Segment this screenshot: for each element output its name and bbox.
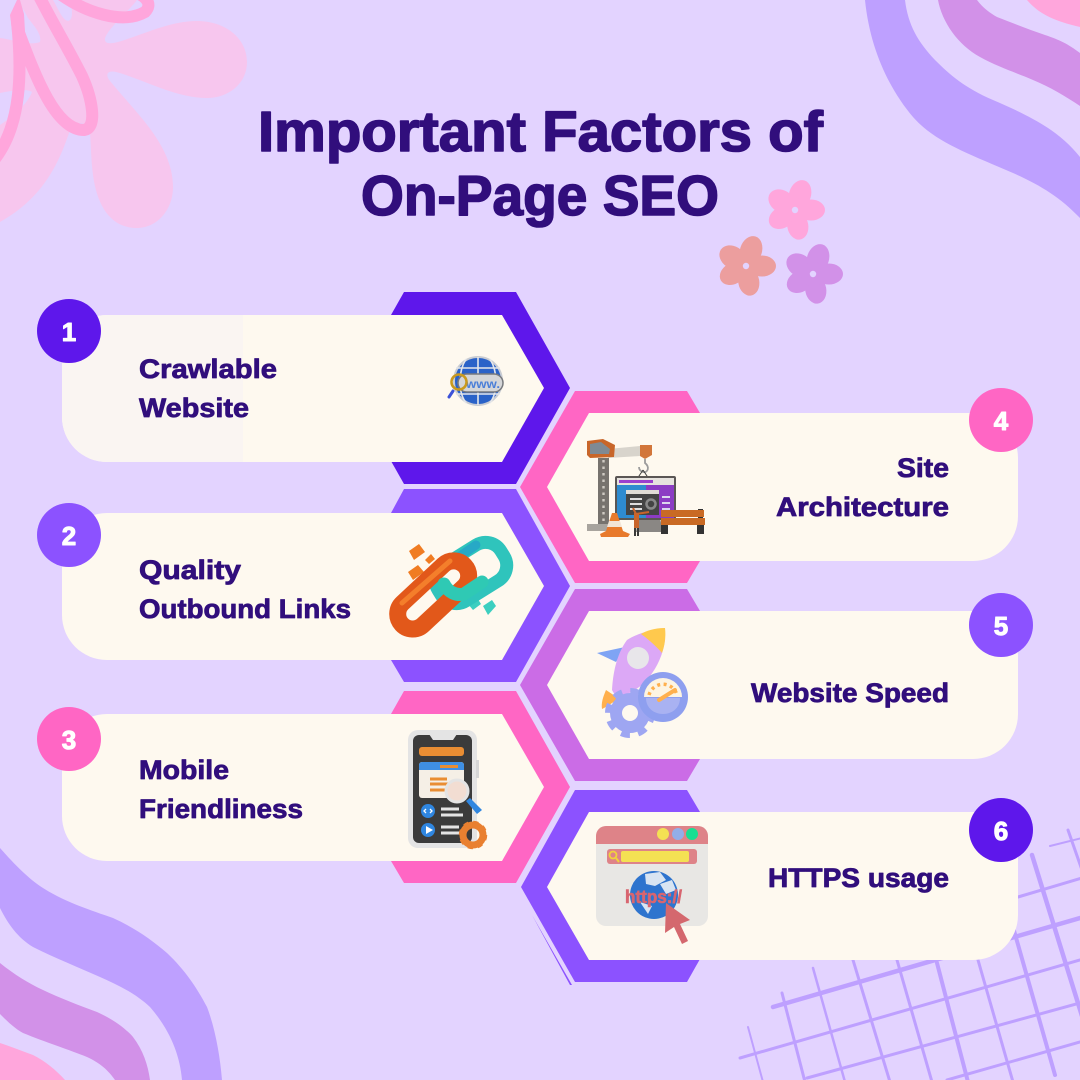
badge 5: 5: [994, 611, 1008, 641]
sliver accent: [532, 915, 572, 985]
decoration: bottom-left ribbons: [0, 848, 222, 1080]
card 1: [62, 315, 544, 462]
label 3: Friendliness: [139, 794, 303, 824]
badge 5: [969, 593, 1033, 657]
badge 3: 3: [62, 725, 76, 755]
title: Important Factors of: [258, 100, 824, 164]
icon: browser window with https globe: [596, 826, 708, 944]
hexagon frame 6: [521, 790, 700, 982]
title: [258, 100, 824, 228]
decoration: bottom-right grid: [740, 830, 1080, 1080]
decoration: top-right ribbons: [865, 0, 1080, 218]
icon: rocket, gear and speedometer: [597, 628, 688, 735]
icon: smartphone with gear: [408, 730, 486, 848]
label 2: [139, 555, 351, 624]
panel 2: Quality Outbound Links: [37, 489, 570, 682]
badge 4: [969, 388, 1033, 452]
card 3: [62, 714, 544, 861]
panel 3: Mobile Friendliness: [37, 691, 570, 883]
label 4: [776, 453, 949, 522]
label 5: Website Speed: [751, 678, 949, 708]
title: On-Page SEO: [361, 164, 719, 228]
label 1: Website: [139, 393, 249, 423]
label 2: Outbound Links: [139, 594, 351, 624]
label 6: HTTPS usage: [768, 863, 949, 893]
label 3: Mobile: [139, 755, 229, 785]
label 4: Site: [897, 453, 949, 483]
badge 2: [37, 503, 101, 567]
card 4: [547, 413, 1018, 561]
icon: www globe with magnifier: www.: [465, 377, 500, 391]
label 1: Crawlable: [139, 354, 277, 384]
panel 4: Site Architecture: [520, 388, 1033, 583]
icon: chain links: [392, 536, 514, 635]
label 3: [139, 755, 303, 824]
card 2: [62, 513, 544, 660]
icon: crane and monitor under construction: [587, 439, 705, 537]
icon: www globe with magnifier: [449, 357, 503, 405]
hexagon frame 5: [520, 589, 700, 781]
hexagon frame 3: [391, 691, 570, 883]
hexagon frame 4: [520, 391, 700, 583]
badge 1: [37, 299, 101, 363]
hexagon frame 2: [391, 489, 570, 682]
panel 1: Crawlable Website: [37, 292, 570, 484]
icon: browser window with https globe: https://: [625, 887, 682, 907]
hexagon frame 1: [391, 292, 570, 484]
decoration: top-left flower: [0, 0, 247, 228]
badge 4: 4: [994, 406, 1009, 436]
card 5: [547, 611, 1018, 759]
badge 6: [969, 798, 1033, 862]
card 6: [547, 812, 1018, 960]
label 1: [139, 354, 277, 423]
decoration: small flowers: [715, 177, 843, 305]
badge 1: 1: [62, 317, 76, 347]
badge 6: 6: [994, 816, 1008, 846]
badge 3: [37, 707, 101, 771]
panel 5: Website Speed: [520, 589, 1033, 781]
panel 6: HTTPS usage: [521, 790, 1033, 985]
label 2: Quality: [139, 555, 241, 585]
badge 2: 2: [62, 521, 76, 551]
label 4: Architecture: [776, 492, 949, 522]
